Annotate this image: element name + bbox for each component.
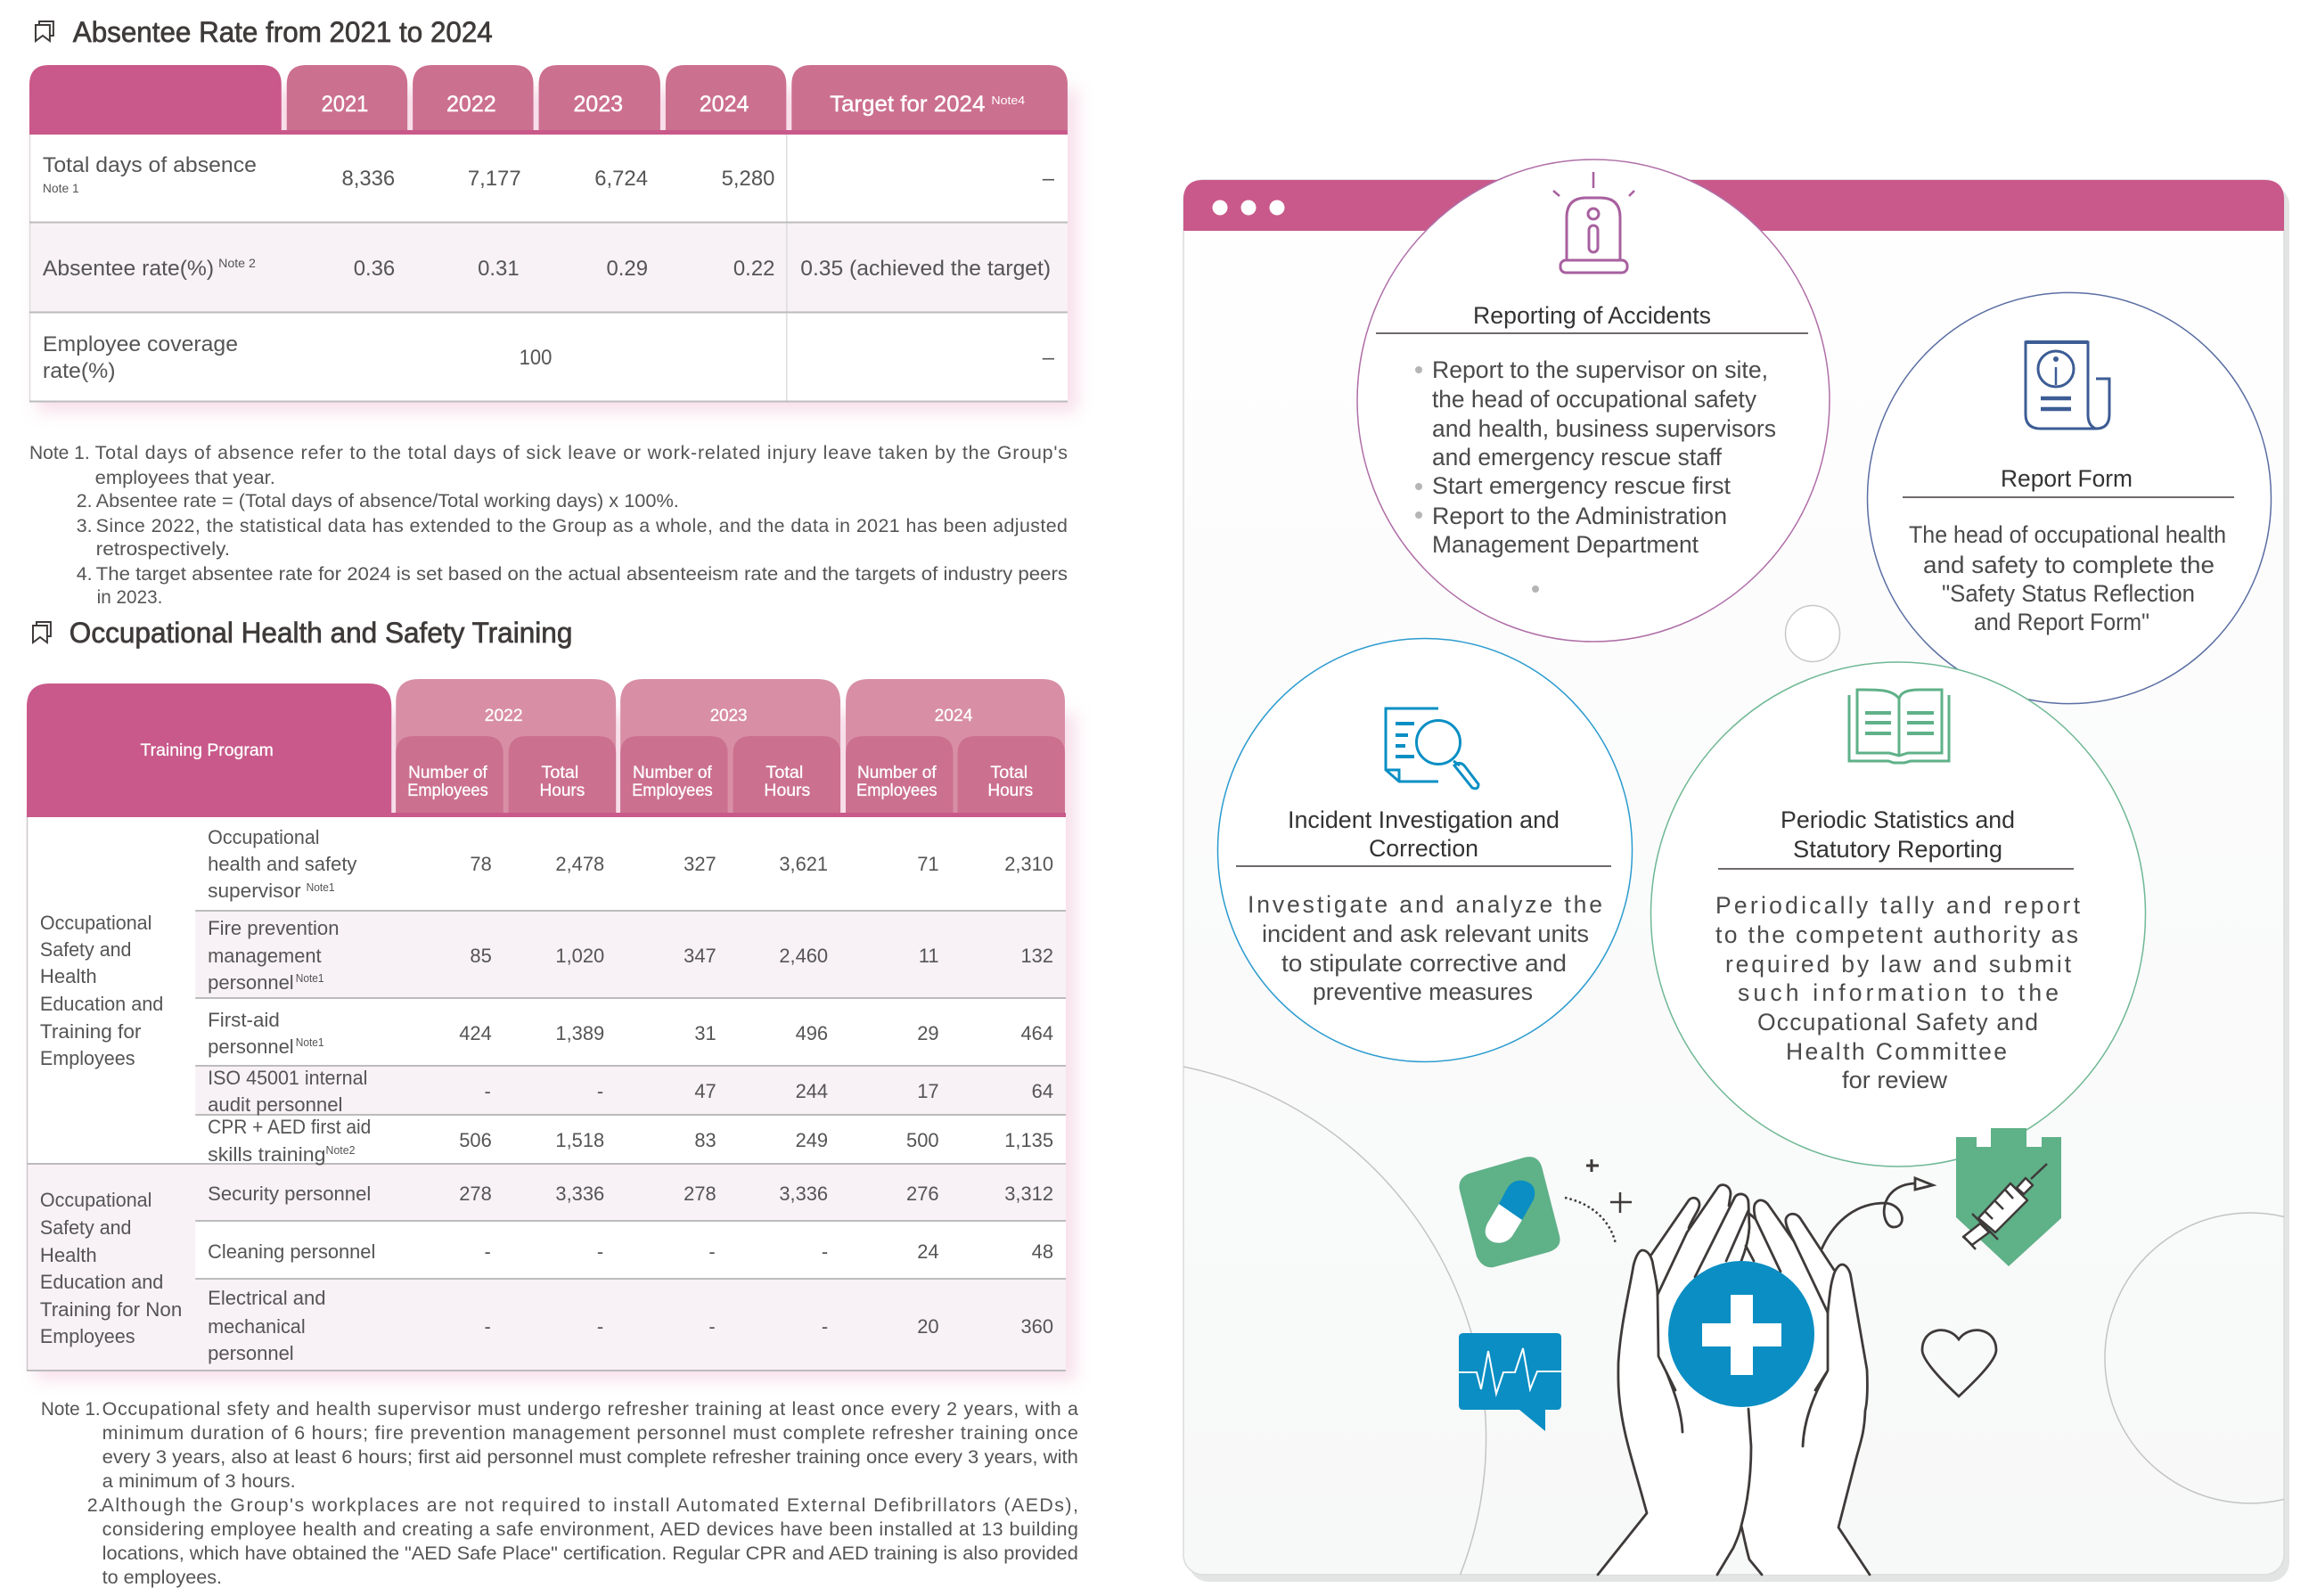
- icon: cupped hands: [1598, 1185, 1870, 1575]
- row: first-aid personnel: [208, 1009, 1053, 1058]
- circle: report form: The head of occupational health: [1909, 521, 2226, 548]
- row: security personnel: 3,312: [1004, 1183, 1053, 1205]
- row: fire prevention management personnel: 347: [684, 945, 716, 967]
- notes: training: locations, which have obtained the "AED Safe Place" certification. Regular CPR and AED training is also provided: [102, 1543, 1078, 1564]
- row: first-aid personnel: 31: [694, 1022, 716, 1044]
- row: CPR + AED first aid skills training: 249: [796, 1129, 828, 1151]
- notes: absentee rate: The target absentee rate for 2024 is set based on the actual absenteeism rate and the targets of industry peers: [96, 563, 1068, 585]
- row: security personnel: 278: [684, 1183, 716, 1205]
- row: CPR + AED first aid skills training: CPR + AED first aid: [208, 1116, 371, 1138]
- row: occupational health and safety supervisor: supervisor: [208, 880, 301, 902]
- table header: Hours: [764, 781, 810, 800]
- row: absentee rate: Note 2: [218, 256, 256, 270]
- notes: training: minimum duration of 6 hours; fire prevention management personnel must complete refresher training once: [102, 1422, 1078, 1444]
- row group label: employees: Education and: [40, 993, 163, 1015]
- row: CPR + AED first aid skills training: 506: [459, 1129, 492, 1151]
- icon: heart outline: [1922, 1330, 1996, 1396]
- circle: incident investigation and correction: Incident Investigation and: [1288, 806, 1560, 833]
- icon: bookmark: [36, 21, 53, 41]
- table header: 2021: [322, 92, 368, 117]
- circle: periodic statistics and statutory reporting: Statutory Reporting: [1793, 836, 2002, 863]
- notes: training: Occupational sfety and health supervisor must undergo refresher training at least once every 2 years, with a: [102, 1398, 1078, 1420]
- icon: alarm light: [1553, 172, 1634, 273]
- row: electrical and mechanical personnel: -: [822, 1315, 828, 1338]
- row: electrical and mechanical personnel: -: [597, 1315, 603, 1338]
- bullet list: the head of occupational safety: [1432, 386, 1757, 413]
- notes: training: every 3 years, also at least 6 hours; first aid personnel must complete refresher training once every 3 years, with: [102, 1446, 1078, 1468]
- row: occupational health and safety supervisor: 78: [470, 853, 492, 875]
- table header: Employees: [856, 781, 937, 800]
- row: occupational health and safety supervisor: health and safety: [208, 853, 356, 875]
- icon: bookmark: [33, 622, 51, 642]
- row: CPR + AED first aid skills training: [208, 1116, 1053, 1166]
- circle: periodic statistics and statutory reporting: to the competent authority as: [1715, 921, 2078, 948]
- circle: periodic statistics and statutory reporting: [1650, 662, 2146, 1166]
- row: occupational health and safety supervisor: 71: [917, 853, 939, 875]
- row: first-aid personnel: 424: [459, 1022, 492, 1044]
- row: CPR + AED first aid skills training: skills training: [208, 1143, 326, 1166]
- row group label: employees: Safety and: [40, 938, 132, 961]
- left column: tables and notes: [27, 16, 1078, 1588]
- table header: [27, 679, 1066, 817]
- row: total days of absence: Note 1: [43, 181, 79, 195]
- row: electrical and mechanical personnel: -: [708, 1315, 716, 1338]
- circle: report form: and Report Form": [1974, 609, 2149, 635]
- row: cleaning personnel: -: [597, 1240, 603, 1263]
- table header: 2024: [700, 92, 749, 117]
- circle: incident investigation and correction: Investigate and analyze the: [1248, 891, 1602, 918]
- row: ISO 45001 internal audit personnel: ISO 45001 internal: [208, 1067, 367, 1089]
- circle: reporting of accidents: Reporting of Accidents: [1473, 302, 1711, 329]
- table header: Number of: [857, 763, 937, 782]
- icon: medical cross circle: [1668, 1261, 1814, 1407]
- row: total days of absence: –: [1043, 167, 1055, 191]
- bullet list: Start emergency rescue first: [1432, 472, 1732, 499]
- notes: absentee rate: 4.: [77, 563, 93, 585]
- notes: training: Note 1.: [41, 1398, 101, 1420]
- notes: training: Although the Group's workplaces are not required to install Automated External Defibrillators (AEDs),: [102, 1494, 1078, 1516]
- heading: absentee rate: Absentee Rate from 2021 to 2024: [73, 16, 493, 48]
- row: security personnel: Security personnel: [208, 1183, 371, 1205]
- table header: Employees: [632, 781, 713, 800]
- row: employee coverage rate: rate(%): [43, 359, 116, 383]
- row group label: non employees: Education and: [40, 1271, 163, 1293]
- row: cleaning personnel: [208, 1240, 1053, 1263]
- row group label: non employees: [40, 1189, 182, 1347]
- notes: training: a minimum of 3 hours.: [102, 1470, 296, 1492]
- row: electrical and mechanical personnel: 20: [917, 1315, 939, 1338]
- row: first-aid personnel: 1,389: [555, 1022, 604, 1044]
- row: CPR + AED first aid skills training: 1,135: [1004, 1129, 1053, 1151]
- row: cleaning personnel: -: [822, 1240, 828, 1263]
- row: security personnel: 3,336: [555, 1183, 604, 1205]
- row: ISO 45001 internal audit personnel: 17: [917, 1080, 939, 1102]
- notes: absentee rate: 3.: [77, 515, 93, 536]
- table header: Hours: [540, 781, 585, 800]
- row group label: employees: Training for: [40, 1020, 141, 1043]
- row: fire prevention management personnel: 132: [1021, 945, 1053, 967]
- row: CPR + AED first aid skills training: 500: [906, 1129, 939, 1151]
- row: cleaning personnel: -: [708, 1240, 716, 1263]
- table header: 2022: [485, 706, 523, 725]
- row: fire prevention management personnel: 11: [919, 945, 939, 967]
- notes: absentee rate: Since 2022, the statistical data has extended to the Group as a whole, and the data in 2021 has been adjusted: [96, 515, 1068, 536]
- row: employee coverage rate: [43, 332, 1055, 383]
- table: training: [27, 679, 1076, 1379]
- row: ISO 45001 internal audit personnel: -: [597, 1080, 603, 1102]
- row: security personnel: 278: [459, 1183, 492, 1205]
- table header: Number of: [408, 763, 487, 782]
- row: absentee rate: 0.22: [733, 257, 774, 281]
- row: occupational health and safety supervisor: 327: [684, 853, 716, 875]
- illustration: hands and medical icons: [1459, 1128, 2061, 1575]
- row: total days of absence: Total days of absence: [43, 153, 257, 177]
- icon: ecg speech bubble: [1459, 1333, 1561, 1431]
- table header: 2024: [935, 706, 973, 725]
- notes: absentee rate: Total days of absence refer to the total days of sick leave or work-related injury leave taken by the Group's: [95, 442, 1068, 463]
- panel: browser window: [1183, 180, 2289, 1582]
- row: fire prevention management personnel: Fire prevention: [208, 917, 339, 939]
- bullet list: and emergency rescue staff: [1432, 444, 1723, 471]
- row: electrical and mechanical personnel: mechanical: [208, 1315, 306, 1338]
- row: employee coverage rate: –: [1043, 346, 1055, 370]
- bullet list: Management Department: [1432, 531, 1699, 558]
- row: absentee rate: 0.35 (achieved the target): [800, 257, 1051, 281]
- row: occupational health and safety supervisor: 2,478: [555, 853, 604, 875]
- notes: training: considering employee health and creating a safe environment, AED devices have been installed at 13 building: [102, 1518, 1078, 1540]
- table header: Total: [766, 763, 803, 782]
- circle: report form: and safety to complete the: [1923, 552, 2215, 578]
- row: total days of absence: [43, 153, 1055, 195]
- table header: Note4: [991, 94, 1025, 107]
- bullet list: and health, business supervisors: [1432, 415, 1776, 442]
- row: total days of absence: 8,336: [341, 167, 395, 191]
- circle: periodic statistics and statutory reporting: required by law and submit: [1725, 951, 2072, 978]
- circle: incident investigation and correction: [1217, 638, 1633, 1062]
- row: first-aid personnel: 496: [796, 1022, 828, 1044]
- table header: [29, 65, 1068, 135]
- icon: report form: [2026, 342, 2109, 429]
- row group label: non employees: Occupational: [40, 1189, 151, 1211]
- bullet list: Report to the Administration: [1432, 503, 1727, 529]
- row: security personnel: 276: [906, 1183, 939, 1205]
- row: CPR + AED first aid skills training: 83: [694, 1129, 716, 1151]
- row group label: employees: [40, 912, 163, 1069]
- row: first-aid personnel: Note1: [296, 1035, 324, 1049]
- circle: periodic statistics and statutory reporting: Periodic Statistics and: [1781, 806, 2015, 833]
- row: absentee rate: [43, 256, 1051, 281]
- icon: document with magnifier: [1386, 708, 1478, 789]
- row group label: employees: Health: [40, 965, 97, 987]
- row: occupational health and safety supervisor: 3,621: [779, 853, 828, 875]
- notes: absentee rate: [29, 442, 1068, 608]
- notes: absentee rate: Note 1.: [29, 442, 90, 463]
- row: absentee rate: Absentee rate(%): [43, 257, 214, 281]
- window title bar: [1183, 180, 2284, 231]
- icon: shield with syringe: [1956, 1128, 2061, 1266]
- row: fire prevention management personnel: 2,460: [779, 945, 828, 967]
- row group label: non employees: Health: [40, 1244, 97, 1266]
- icon: pill card: [1459, 1157, 1560, 1267]
- icon: open book: [1849, 690, 1949, 763]
- row: first-aid personnel: 29: [917, 1022, 939, 1044]
- table header: 2022: [446, 92, 496, 117]
- circle: periodic statistics and statutory reporting: Periodically tally and report: [1715, 892, 2081, 919]
- row: first-aid personnel: 464: [1021, 1022, 1053, 1044]
- row: absentee rate: 0.31: [478, 257, 520, 281]
- bullet list: Report to the supervisor on site,: [1432, 356, 1768, 383]
- notes: absentee rate: employees that year.: [95, 467, 275, 488]
- icon: swirl arrow: [1822, 1178, 1933, 1249]
- circle: incident investigation and correction: Correction: [1369, 835, 1478, 862]
- row: absentee rate: 0.29: [607, 257, 648, 281]
- row: fire prevention management personnel: management: [208, 945, 322, 967]
- row: cleaning personnel: Cleaning personnel: [208, 1240, 375, 1263]
- table header: Employees: [407, 781, 488, 800]
- notes: training: to employees.: [102, 1567, 222, 1588]
- row: ISO 45001 internal audit personnel: [208, 1067, 1053, 1116]
- row: electrical and mechanical personnel: 360: [1021, 1315, 1053, 1338]
- bullet list: [1415, 356, 1776, 593]
- circle: incident investigation and correction: incident and ask relevant units: [1262, 921, 1589, 947]
- row: CPR + AED first aid skills training: Note2: [326, 1143, 355, 1157]
- notes: training: 2.: [87, 1494, 103, 1516]
- row: first-aid personnel: First-aid: [208, 1009, 280, 1031]
- row: fire prevention management personnel: Note1: [296, 971, 324, 985]
- table header: Training Program: [140, 741, 274, 760]
- row: security personnel: [208, 1183, 1053, 1205]
- row group label: non employees: Safety and: [40, 1216, 132, 1239]
- row: first-aid personnel: personnel: [208, 1035, 294, 1058]
- table header: Number of: [633, 763, 712, 782]
- notes: absentee rate: retrospectively.: [96, 538, 230, 560]
- row: fire prevention management personnel: 1,020: [555, 945, 604, 967]
- row: fire prevention management personnel: personnel: [208, 971, 294, 994]
- table header: Total: [542, 763, 578, 782]
- circle: incident investigation and correction: to stipulate corrective and: [1281, 950, 1567, 977]
- row: electrical and mechanical personnel: [208, 1287, 1053, 1364]
- row: ISO 45001 internal audit personnel: -: [484, 1080, 491, 1102]
- row group label: employees: Employees: [40, 1047, 135, 1069]
- row: fire prevention management personnel: 85: [470, 945, 492, 967]
- circle: reporting of accidents: [1357, 160, 1830, 642]
- row group label: non employees: Employees: [40, 1325, 135, 1347]
- row: employee coverage rate: Employee coverage: [43, 332, 238, 356]
- notes: absentee rate: 2.: [77, 490, 93, 512]
- row: electrical and mechanical personnel: personnel: [208, 1342, 294, 1364]
- table header: Target for 2024: [830, 92, 985, 117]
- circle: report form: Report Form: [2001, 465, 2133, 492]
- row: ISO 45001 internal audit personnel: 244: [796, 1080, 828, 1102]
- circle: incident investigation and correction: preventive measures: [1313, 978, 1533, 1005]
- row: total days of absence: 6,724: [594, 167, 648, 191]
- notes: absentee rate: Absentee rate = (Total days of absence/Total working days) x 100%.: [96, 490, 679, 512]
- circle: periodic statistics and statutory reporting: such information to the: [1738, 979, 2059, 1006]
- table: absentee rate: [29, 65, 1077, 412]
- table header: Total: [990, 763, 1028, 782]
- row: fire prevention management personnel: [208, 917, 1053, 994]
- row: total days of absence: 7,177: [468, 167, 521, 191]
- row: ISO 45001 internal audit personnel: 47: [694, 1080, 716, 1102]
- heading: occupational health and safety training: Occupational Health and Safety Training: [70, 617, 572, 649]
- row: electrical and mechanical personnel: Electrical and: [208, 1287, 326, 1309]
- row: ISO 45001 internal audit personnel: 64: [1032, 1080, 1053, 1102]
- row: cleaning personnel: 24: [917, 1240, 939, 1263]
- table header: Hours: [987, 781, 1033, 800]
- notes: absentee rate: in 2023.: [97, 586, 162, 608]
- row: occupational health and safety supervisor: 2,310: [1004, 853, 1053, 875]
- decorative small circle: [1786, 606, 1839, 661]
- circle: report form: [1868, 292, 2271, 704]
- table header: 2023: [710, 706, 748, 725]
- row: security personnel: 3,336: [779, 1183, 828, 1205]
- circle: report form: "Safety Status Reflection: [1942, 580, 2195, 607]
- row group label: non employees: Training for Non: [40, 1298, 182, 1321]
- table header: 2023: [573, 92, 623, 117]
- row: total days of absence: 5,280: [722, 167, 774, 191]
- notes: training: [41, 1398, 1078, 1588]
- row: electrical and mechanical personnel: -: [484, 1315, 491, 1338]
- row group label: employees: Occupational: [40, 912, 151, 934]
- background arcs: [1183, 1067, 2284, 1575]
- row: employee coverage rate: 100: [520, 346, 552, 370]
- circle: periodic statistics and statutory reporting: for review: [1842, 1067, 1948, 1093]
- row: cleaning personnel: 48: [1032, 1240, 1053, 1263]
- row: occupational health and safety supervisor: Note1: [307, 880, 335, 894]
- row: occupational health and safety supervisor: Occupational: [208, 826, 320, 848]
- circle: periodic statistics and statutory reporting: Health Committee: [1786, 1038, 2007, 1065]
- circle: periodic statistics and statutory reporting: Occupational Safety and: [1757, 1009, 2038, 1035]
- row: ISO 45001 internal audit personnel: audit personnel: [208, 1093, 342, 1116]
- row: absentee rate: 0.36: [354, 257, 395, 281]
- row: occupational health and safety supervisor: [208, 826, 1053, 902]
- icon: plus signs and dotted arc: [1565, 1159, 1632, 1244]
- row: cleaning personnel: -: [484, 1240, 491, 1263]
- row: CPR + AED first aid skills training: 1,518: [555, 1129, 604, 1151]
